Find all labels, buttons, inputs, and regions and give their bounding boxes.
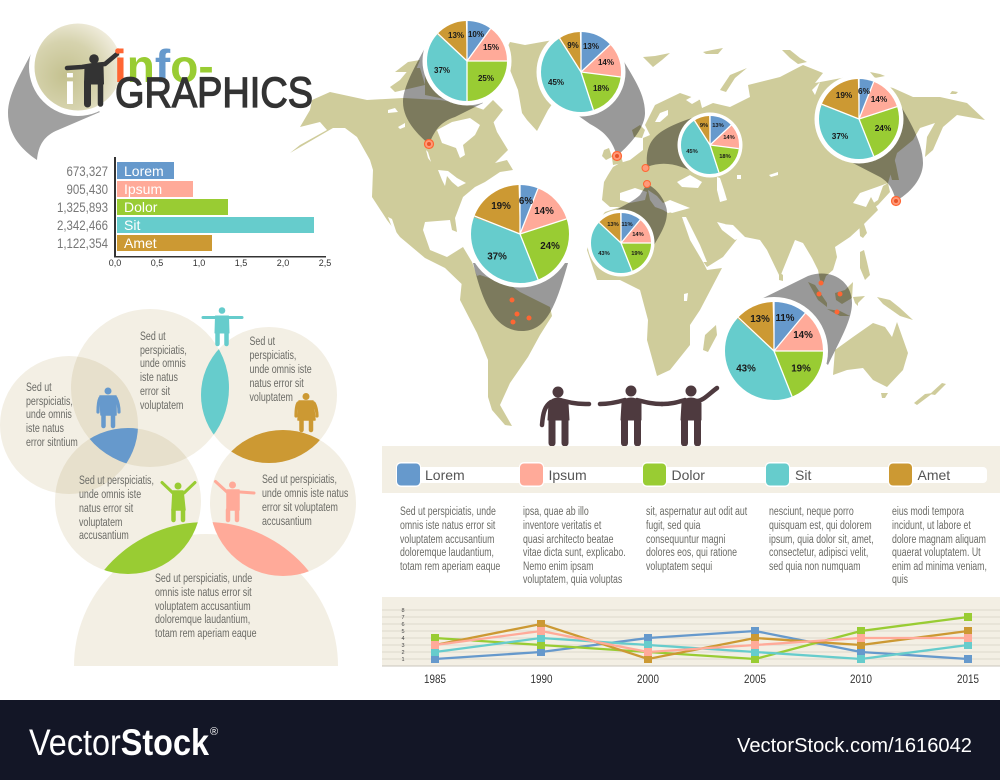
bar labels: Dolor <box>124 199 158 215</box>
line chart <box>382 597 1000 686</box>
pie chart: east asia: 19% <box>836 90 853 100</box>
legend: sit: Sit <box>795 467 811 483</box>
bar values: 905,430 <box>67 181 108 197</box>
venn text: lower left: accusantium <box>79 529 129 542</box>
venn text: lower left: natus error sit <box>79 502 133 515</box>
venn text: bottom: Sed ut perspiciatis, unde <box>155 572 252 585</box>
figure in logo <box>67 48 121 104</box>
venn text: top right: perspiciatis, <box>250 349 296 362</box>
footer bar <box>0 700 1000 780</box>
bar labels: Ipsum <box>124 181 162 197</box>
pie chart: europe west: 9% <box>567 41 579 50</box>
pie chart: north africa: 43% <box>598 251 610 257</box>
venn text: top: unde omnis <box>140 357 186 370</box>
legend: ipsum <box>519 462 587 487</box>
y axis labels: 7 <box>401 615 405 621</box>
y axis labels: 3 <box>401 643 405 649</box>
text column 3: dolores eos, qui ratione <box>646 546 737 559</box>
bars <box>117 162 314 251</box>
figures: three linked people <box>542 386 717 443</box>
bar labels: Sit <box>124 217 140 233</box>
text column 3: fugit, sed quia <box>646 519 701 532</box>
legend: lorem: Lorem <box>425 467 465 483</box>
pie chart: east asia: 24% <box>875 123 892 133</box>
series: gold <box>431 620 972 663</box>
legend: amet: Amet <box>918 467 950 483</box>
registered mark: ® <box>210 726 218 738</box>
venn text: left: Sed ut <box>26 381 52 394</box>
venn lens: pink <box>212 522 309 576</box>
pie chart: north america: 37% <box>434 66 450 75</box>
text column 5: enim ad minima veniam, <box>892 560 987 573</box>
title word: GRAPHICS: GRAPHICS <box>115 69 313 117</box>
venn text: lower left: Sed ut perspiciatis, <box>79 474 154 487</box>
pie chart: eastern europe: 45% <box>686 149 698 155</box>
text column 2: inventore veritatis et <box>523 519 601 532</box>
venn text: top: Sed ut <box>140 330 166 343</box>
bar axis ticks: 2,5 <box>319 258 331 268</box>
person 3 <box>662 386 717 443</box>
bar values <box>57 163 108 251</box>
text column 2: vitae dicta sunt, explicabo. <box>523 546 626 559</box>
legend: sit <box>765 462 811 487</box>
pie chart: south america: 6% <box>519 196 533 207</box>
venn text: top: voluptatem <box>140 399 184 412</box>
bar axis ticks: 0,5 <box>151 258 163 268</box>
venn text: bottom: doloremque laudantium, <box>155 613 250 626</box>
venn lens: green <box>104 522 198 574</box>
bar chart <box>57 157 331 268</box>
venn text: bottom: omnis iste natus error sit <box>155 586 252 599</box>
bar axis ticks <box>109 258 331 268</box>
pie chart: europe west: 14% <box>598 58 614 67</box>
pie chart: north africa: 14% <box>632 232 644 238</box>
venn lens: gold <box>231 430 320 463</box>
pie chart: north america: 10% <box>468 30 484 39</box>
venn text: lower right: unde omnis iste natus <box>262 487 348 500</box>
pie chart: north america: 15% <box>483 43 499 52</box>
venn text: top: iste natus <box>140 371 178 384</box>
figure: gold <box>296 393 317 430</box>
y axis labels: 1 <box>401 657 405 663</box>
pie chart: south east asia: 13% <box>750 314 770 325</box>
pie chart: north africa: 11% <box>621 222 633 228</box>
venn text: top right: natus error sit <box>250 377 304 390</box>
text column 2: ipsa, quae ab illo <box>523 505 589 518</box>
bar values: 673,327 <box>67 163 108 179</box>
venn text: left: error sitntium <box>26 436 78 449</box>
text column 5: quaerat voluptatem. Ut <box>892 546 981 559</box>
text column 1: voluptatem accusantium <box>400 533 495 546</box>
series: teal <box>431 634 972 663</box>
figure: blue <box>98 388 119 426</box>
text column 1: omnis iste natus error sit <box>400 519 495 532</box>
text column 1: Sed ut perspiciatis, unde <box>400 505 496 518</box>
pie chart: east asia: 37% <box>832 131 849 141</box>
text column 4: consectetur, adipisci velit, <box>769 546 868 559</box>
pie chart: south america: 24% <box>540 241 560 252</box>
venn text: lower right: Sed ut perspiciatis, <box>262 473 337 486</box>
pie chart: eastern europe: 13% <box>712 123 724 129</box>
venn text: top right: voluptatem <box>250 391 293 404</box>
legend: lorem <box>396 462 465 487</box>
person 1 <box>542 386 589 443</box>
venn text: lower left: unde omnis iste <box>79 488 141 501</box>
bar labels: Lorem <box>124 163 164 179</box>
text column 5: quis <box>892 573 908 586</box>
pie chart: south east asia <box>720 297 828 405</box>
bar axis ticks: 1,0 <box>193 258 205 268</box>
venn lens: blue <box>90 428 138 464</box>
pie chart: north america: 25% <box>478 74 494 83</box>
y axis labels: 2 <box>401 650 405 656</box>
pie chart: south america: 14% <box>534 206 554 217</box>
venn text: top right: unde omnis iste <box>250 363 312 376</box>
y axis labels: 8 <box>401 608 405 614</box>
pie chart: south east asia: 14% <box>793 330 813 341</box>
title letter: i: i <box>64 66 76 114</box>
venn text: left: perspiciatis, <box>26 395 73 408</box>
text column 3: consequuntur magni <box>646 533 725 546</box>
pie chart: south america: 19% <box>491 201 511 212</box>
footer logo: VectorStock <box>29 722 209 763</box>
year labels: 1990 <box>531 673 552 686</box>
bar values: 1,122,354 <box>57 235 108 251</box>
venn text: top: perspiciatis, <box>140 344 187 357</box>
text column 5: incidunt, ut labore et <box>892 519 971 532</box>
bar values: 1,325,893 <box>57 199 108 215</box>
logo callout tail <box>8 52 100 160</box>
series: pink <box>431 627 972 656</box>
venn text: top right: Sed ut <box>250 335 275 348</box>
text column 3: voluptatem sequi <box>646 560 712 573</box>
text column 1: doloremque laudantium, <box>400 546 494 559</box>
pie chart: europe west: 18% <box>593 84 609 93</box>
figure: teal <box>203 307 242 344</box>
pie chart: south east asia: 11% <box>775 313 795 324</box>
legend: ipsum: Ipsum <box>548 467 587 483</box>
legend: dolor <box>642 462 705 487</box>
text column 2: quasi architecto beatae <box>523 533 614 546</box>
venn diagram <box>0 307 356 666</box>
legend: dolor: Dolor <box>672 467 705 483</box>
venn text: top: error sit <box>140 385 170 398</box>
text column 4: ipsum, quia dolor sit, amet, <box>769 533 874 546</box>
y axis labels: 5 <box>401 629 405 635</box>
year labels: 2015 <box>957 673 979 686</box>
year labels: 2010 <box>850 673 872 686</box>
logo circle <box>29 18 127 116</box>
pie chart: east asia <box>814 74 904 164</box>
year labels <box>424 673 979 686</box>
world map <box>290 40 985 426</box>
text column 4: nesciunt, neque porro <box>769 505 854 518</box>
pie chart: europe west <box>536 28 626 116</box>
logo: info-graphics title <box>8 18 313 160</box>
legend band <box>382 446 1000 493</box>
year labels: 1985 <box>424 673 446 686</box>
bar values: 2,342,466 <box>57 217 108 233</box>
map location pins <box>424 140 900 324</box>
legend: amet <box>888 462 950 487</box>
person 2 <box>600 386 662 443</box>
pie chart: east asia: 6% <box>858 86 871 96</box>
pie chart: eastern europe <box>678 112 742 178</box>
pie chart: north africa: 19% <box>631 251 643 257</box>
bar axis ticks: 2,0 <box>277 258 289 268</box>
bar axis ticks: 1,5 <box>235 258 247 268</box>
bar axis ticks: 0,0 <box>109 258 121 268</box>
pie chart: europe west: 45% <box>548 78 564 87</box>
text column 4: sed quia non numquam <box>769 560 861 573</box>
pie chart: eastern europe: 14% <box>723 135 735 141</box>
venn text: lower right: error sit voluptatem <box>262 501 338 514</box>
text column 5: dolore magnam aliquam <box>892 533 986 546</box>
bar labels: Amet <box>124 235 157 251</box>
venn text: lower left: voluptatem <box>79 516 123 529</box>
venn lens: teal <box>201 349 229 434</box>
footer url: VectorStock.com/1616042 <box>737 735 972 757</box>
pie chart: north africa: 13% <box>607 222 619 228</box>
venn circles <box>0 309 356 666</box>
series: green <box>431 613 972 663</box>
y axis labels: 4 <box>401 636 405 642</box>
pie chart: south america: 37% <box>487 252 507 262</box>
pie chart: south america <box>466 180 574 288</box>
pie chart: north america: 13% <box>448 31 464 40</box>
pie chart: south east asia: 19% <box>791 364 811 374</box>
text column 3: sit, aspernatur aut odit aut <box>646 505 747 518</box>
text column 2: Nemo enim ipsam <box>523 560 594 573</box>
text column 2: voluptatem, quia voluptas <box>523 573 622 586</box>
text column 1: totam rem aperiam eaque <box>400 560 500 573</box>
pie chart: eastern europe: 18% <box>719 154 731 160</box>
venn text: left: iste natus <box>26 422 64 435</box>
venn text: lower right: accusantium <box>262 515 312 528</box>
year labels: 2000 <box>637 673 659 686</box>
venn text: bottom: voluptatem accusantium <box>155 600 251 613</box>
pie chart: eastern europe: 9% <box>700 123 708 129</box>
pie chart: north africa <box>588 210 654 276</box>
venn text: bottom: totam rem aperiam eaque <box>155 627 257 640</box>
venn text: left: unde omnis <box>26 408 72 421</box>
figure: pink <box>216 482 254 520</box>
text column 5: eius modi tempora <box>892 505 964 518</box>
y axis labels: 6 <box>401 622 405 628</box>
figure: green <box>162 482 195 520</box>
pie chart: south east asia: 43% <box>736 364 756 374</box>
pie chart: north america <box>422 16 512 106</box>
y axis labels <box>401 608 405 663</box>
bar labels <box>124 163 164 251</box>
title word: info-: info- <box>114 40 214 92</box>
pie chart: east asia: 14% <box>871 94 888 104</box>
text column 4: quisquam est, qui dolorem <box>769 519 872 532</box>
year labels: 2005 <box>744 673 766 686</box>
callout shapes: map magnifiers <box>403 48 923 365</box>
pie chart: europe west: 13% <box>583 42 599 51</box>
series: blue <box>431 627 972 663</box>
